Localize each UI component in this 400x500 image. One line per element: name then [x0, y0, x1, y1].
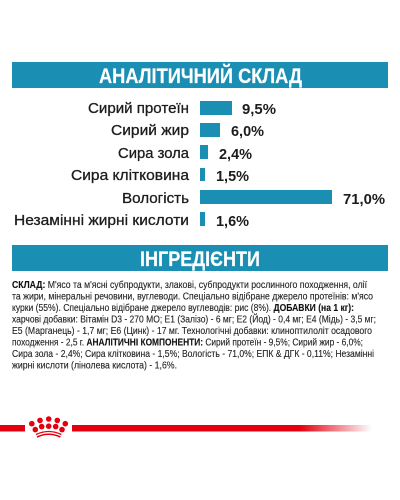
row: crude fibre: Сира клітковина [71, 167, 190, 184]
row: crude fibre: 1,5% [216, 168, 249, 185]
row: crude fibre [71, 167, 249, 185]
row: crude protein [88, 100, 276, 118]
row: essential fatty acids: 1,6% [216, 213, 249, 230]
icon: royal crown logo [29, 416, 68, 437]
row: moisture: Вологість [122, 190, 189, 207]
panel: ingredients [12, 245, 388, 372]
row: crude fat: 6,0% [231, 123, 264, 140]
row: crude protein: Сирий протеїн [88, 100, 189, 117]
row: moisture [122, 190, 385, 208]
row: moisture: 71,0% [343, 191, 385, 208]
panel: analytical composition [12, 62, 388, 230]
footer brand line [0, 425, 372, 432]
row: crude fat: Сирий жир [111, 122, 189, 139]
heading banner: analytical composition [12, 62, 388, 88]
text block: composition [12, 279, 376, 372]
heading banner: ingredients: ІНГРЕДІЄНТИ [140, 248, 260, 271]
bar chart [14, 100, 385, 230]
heading banner: ingredients [12, 245, 388, 271]
text block: composition: походження - 2,5 г. АНАЛІТИЧНІ КОМПОНЕНТИ: Сирий протеїн - 9,5%; Сирий жир - 6,0%; [12, 338, 363, 348]
row: crude fat [111, 122, 264, 140]
text block: composition: курки (55%). Спеціально відібране джерело вуглеводів: рис (8%). ДОБАВКИ (на 1 кг): [12, 302, 354, 314]
row: crude ash: Сира зола [118, 145, 190, 162]
row: essential fatty acids: Незамінні жирні кислоти [14, 212, 189, 229]
heading banner: analytical composition: АНАЛІТИЧНИЙ СКЛАД [99, 64, 302, 88]
row: crude protein: 9,5% [242, 101, 276, 118]
row: essential fatty acids [14, 212, 249, 230]
text block: composition: жирні кислоти (лінолева кислота) - 1,6%. [12, 360, 177, 372]
row: crude ash: 2,4% [219, 146, 252, 163]
row: crude ash [118, 145, 252, 163]
